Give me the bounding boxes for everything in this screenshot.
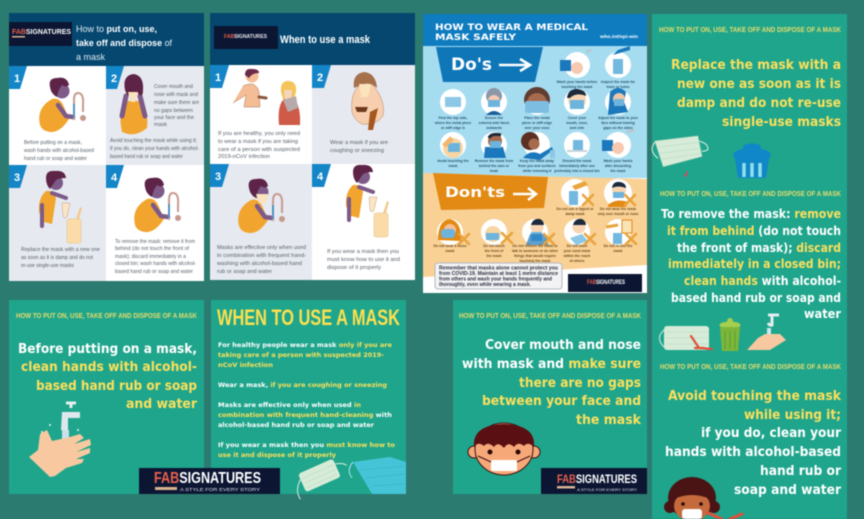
header: HOW TO WEAR A MEDICAL <box>435 23 588 33</box>
do's row 2: Ensure the <box>485 116 503 120</box>
panel: cover mouth and nose: HOW TO PUT ON, USE, TAKE OFF AND DISPOSE OF A MASK <box>459 311 641 320</box>
don'ts row 2: talk to someone or do other <box>512 249 559 253</box>
step 2: 2 <box>111 73 117 85</box>
panel: before putting on a mask: HOW TO PUT ON, USE, TAKE OFF AND DISPOSE OF A MASK <box>16 311 197 320</box>
icon: green bin <box>720 318 740 351</box>
step 1: If you are healthy, you only need <box>218 131 300 137</box>
panel header <box>210 13 415 65</box>
do's row 3: immediately after use <box>559 164 595 168</box>
icon: washing hands under tap <box>29 403 91 477</box>
do's row 2: Cover your <box>568 116 587 120</box>
icon: girl with mask <box>664 477 742 519</box>
section: avoid touching: while using it; <box>744 408 841 423</box>
reminder note: from others and wash your hands frequently and <box>439 276 552 282</box>
do's row 2: or stiff edge is <box>441 126 465 130</box>
do's row 3: Discard the mask <box>562 159 592 163</box>
step 2: based hand rub or soap and water <box>110 154 183 160</box>
step 4 <box>106 165 196 275</box>
body copy <box>218 341 396 459</box>
don'ts row 2: Do not leave <box>567 244 587 248</box>
step 4: To remove the mask: remove it from <box>115 239 195 245</box>
body copy: For healthy people wear a mask only if you are <box>218 341 393 349</box>
step 3: rub or soap and water <box>217 269 272 275</box>
heading: How to put on, use, <box>76 24 157 35</box>
don'ts row 2: mask <box>614 249 623 253</box>
do's row 3: Wash your hands <box>603 159 633 163</box>
do's row 3: after discarding <box>605 164 631 168</box>
step 4: behind (do not touch the front of <box>115 246 190 252</box>
body copy: alcohol-based hand rub or soap and water <box>218 421 375 429</box>
panel: before putting on a mask: based hand rub or soap <box>36 379 197 394</box>
reminder note: Remember that masks alone cannot protect you <box>439 266 558 272</box>
panel: cover mouth and nose <box>453 300 647 494</box>
section: replace the mask: Replace the mask with a <box>671 58 841 73</box>
panel: cover mouth and nose: between your face and <box>482 394 641 409</box>
step 2 <box>312 65 388 154</box>
section: remove the mask: it from behind (do not touch <box>667 224 841 238</box>
step 3: Replace the mask with a new one <box>21 247 100 253</box>
step 3: 3 <box>14 172 20 184</box>
body copy: combination with frequent hand-cleaning with <box>218 411 392 419</box>
don'ts row 1: damp mask <box>565 212 585 216</box>
don'ts row 2: of others <box>570 259 585 263</box>
icon: red mark <box>684 171 688 177</box>
step 1: wash hands with alcohol-based <box>24 148 94 154</box>
panel: before putting on a mask: clean hands with alcohol- <box>21 360 197 375</box>
do's row 3 <box>437 130 634 173</box>
don'ts row 1: only over mouth or nose <box>598 212 638 216</box>
step 2: nose with mask and <box>154 92 198 98</box>
step 1: 1 <box>215 72 221 84</box>
step 3 <box>9 165 100 269</box>
step 2 <box>106 66 199 160</box>
icon: washing hands <box>747 315 786 350</box>
heading: WHEN TO USE A MASK <box>217 305 400 330</box>
body copy: If you wear a mask then you must know how to <box>218 441 396 449</box>
don'ts row 2: Do not re-use the <box>604 244 632 248</box>
panel: how to wear a medical mask safely <box>423 14 647 293</box>
don'ts banner: Don'ts <box>445 185 505 201</box>
header: who.int/epi-win <box>599 34 638 39</box>
do's row 2: mouth, nose, <box>566 121 588 125</box>
panel: when to use a mask illustrated <box>210 13 415 280</box>
don'ts row 1: Do not use a ripped or <box>556 207 594 211</box>
section: avoid touching: Avoid touching the mask <box>668 389 841 404</box>
logo: FABSIGNATURES <box>587 279 625 286</box>
heading: take off and dispose of <box>76 38 172 49</box>
logo <box>139 468 280 494</box>
icon: blue bin <box>733 144 771 178</box>
step 2: Wear a mask if you are <box>330 140 388 146</box>
step 2: your face and the <box>154 115 194 121</box>
heading: a mask <box>76 52 105 63</box>
do's row 2 <box>434 87 639 130</box>
body copy: nCoV infection <box>218 361 273 369</box>
step 2: Cover mouth and <box>154 84 193 90</box>
don'ts row 2: touching the mask <box>520 259 551 263</box>
don'ts row 2: your used mask <box>564 249 590 253</box>
heading: When to use a mask <box>280 34 371 46</box>
logo <box>541 468 647 494</box>
icon: mask held by fingers <box>660 326 712 350</box>
don'ts row 2: within the reach <box>563 254 590 258</box>
do's row 2: colored-side faces <box>479 121 509 125</box>
body copy: taking care of a person with suspected 2019- <box>218 351 384 359</box>
do's row 1: tears or holes <box>607 85 630 89</box>
step 3: as soon as it is damp and do not <box>21 255 94 261</box>
do's row 3: while removing it <box>522 169 552 173</box>
reminder note: from COVID-19. Maintain at least 1 metre distance <box>439 271 558 277</box>
logo: FABSIGNATURES <box>12 29 71 36</box>
step 1: hand rub or soap and water <box>24 156 87 162</box>
step 1 <box>210 65 300 160</box>
panel: tall right column tips <box>652 14 847 519</box>
do's row 1: touching the mask <box>562 85 593 89</box>
section: replace the mask: new one as soon as it is <box>677 77 841 92</box>
panel: before putting on a mask <box>9 300 280 494</box>
section: replace the mask <box>652 25 841 178</box>
panel: before putting on a mask: and water <box>126 397 198 412</box>
body copy: use it and dispose of it properly <box>218 451 337 459</box>
do's row 3: the mask <box>610 169 626 173</box>
step 2: coughing or sneezing <box>330 148 384 154</box>
step 4: dispose of it properly <box>327 265 382 271</box>
section: remove the mask: immediately in a closed bin; <box>668 257 841 271</box>
section: avoid touching: hands with alcohol-based <box>665 445 841 460</box>
logo: A STYLE FOR EVERY STORY <box>577 488 638 492</box>
reminder note <box>435 263 562 289</box>
do's row 2: Adjust the mask to your <box>598 116 639 120</box>
panel: how to put on, use, take off and dispose of a mask <box>9 13 204 281</box>
step 4: mask); discard immediately in a <box>115 254 186 260</box>
step 4: closed bin; wash hands with alcohol- <box>115 261 196 267</box>
do's row 3: mask <box>449 164 458 168</box>
step 3: Masks are effective only when used <box>217 245 306 251</box>
icon: blue masks <box>349 457 406 494</box>
step 1 <box>9 66 94 162</box>
step 2: mask <box>154 122 168 128</box>
do's row 2: Find the top side, <box>439 116 468 120</box>
logo: FABSIGNATURES <box>154 470 261 487</box>
do's row 3: head <box>490 169 498 173</box>
step 4: must know how to use it and <box>327 257 400 263</box>
step 1: care of a person with suspected <box>218 147 300 153</box>
do's row 1 <box>557 46 636 89</box>
icon: boy with mask <box>468 423 540 475</box>
step 4: 4 <box>317 171 324 183</box>
panel: cover mouth and nose: there are no gaps <box>519 376 641 391</box>
section: remove the mask <box>660 189 841 351</box>
step 4 <box>312 164 400 271</box>
step 2: Avoid touching the mask while using it; <box>110 138 197 144</box>
header: MASK SAFELY <box>435 33 517 43</box>
do's row 3: from you and surfaces <box>518 164 556 168</box>
section: remove the mask: To remove the mask: remove <box>661 207 841 221</box>
do's row 3: behind the ears or <box>479 164 510 168</box>
body copy: Wear a mask, if you are coughing or sneezing <box>218 381 387 389</box>
step 2: if you do, clean your hands with alcohol- <box>110 146 199 152</box>
logo: A STYLE FOR EVERY STORY <box>180 487 260 492</box>
section: avoid touching: if you do, clean your <box>701 426 842 441</box>
panel: when to use a mask text <box>211 300 406 499</box>
don'ts row 2: the front of <box>485 249 504 253</box>
logo <box>214 26 278 49</box>
do's banner: Do's <box>451 55 492 75</box>
section: remove the mask: water <box>804 307 841 321</box>
do's row 2: outwards <box>486 126 502 130</box>
reminder note: thoroughly, even while wearing a mask. <box>439 282 532 288</box>
do's row 3: Remove the mask from <box>475 159 513 163</box>
do's row 3: Avoid touching the <box>437 159 469 163</box>
step 4: based hand rub or soap and water <box>115 269 193 275</box>
section: avoid touching <box>660 362 842 519</box>
do's row 2: over your nose <box>524 126 550 130</box>
step 3: in combination with frequent hand- <box>217 253 306 259</box>
step 2: 2 <box>317 72 323 84</box>
step 1: Before putting on a mask, <box>24 140 82 146</box>
do's row 2: piece or stiff edge <box>522 121 552 125</box>
don'ts background <box>423 173 647 277</box>
do's row 3: Keep the mask away <box>520 159 554 163</box>
don'ts row 2: mask <box>446 249 455 253</box>
section: avoid touching: soap and water <box>734 483 842 498</box>
logo <box>568 274 642 292</box>
do's row 2: Place the metal <box>524 116 550 120</box>
step 1: to wear a mask if you are taking <box>218 139 298 145</box>
icon: mask <box>652 136 708 167</box>
do's row 2: where the metal piece <box>434 121 471 125</box>
step 3: re-use single-use masks <box>21 263 74 269</box>
header <box>423 14 647 46</box>
section: avoid touching: hand rub or <box>760 464 842 479</box>
do's row 2: and chin <box>570 126 584 130</box>
don'ts row 2: Do not remove the mask to <box>513 244 557 248</box>
panel: cover mouth and nose: with mask and make sure <box>462 357 641 372</box>
panel: cover mouth and nose: Cover mouth and nose <box>485 338 641 353</box>
don'ts row 2: Do not touch <box>483 244 505 248</box>
don'ts row 2: things that would require <box>514 254 556 258</box>
don'ts row 2: the mask <box>486 254 502 258</box>
section: remove the mask: the front of mask); discard <box>677 241 841 255</box>
don'ts row 2: Do not wear a loose <box>433 244 467 248</box>
logo <box>9 22 72 46</box>
don'ts row 1 <box>556 179 638 216</box>
panel: cover mouth and nose: the mask <box>576 413 641 428</box>
section: replace the mask: damp and do not re-use <box>677 96 841 111</box>
section: remove the mask: clean hands with alcohol- <box>684 274 841 288</box>
don'ts row 1: Do not wear the mask <box>600 207 636 211</box>
don'ts row 2 <box>433 219 636 263</box>
step 1: 2019-nCoV infection <box>218 154 270 160</box>
body copy: Masks are effective only when used in <box>218 401 361 409</box>
step 3: 3 <box>215 171 221 183</box>
icon: white mask <box>290 454 352 499</box>
logo: FABSIGNATURES <box>224 34 267 40</box>
panel: before putting on a mask: Before putting on a mask, <box>18 342 197 357</box>
do's row 3: preferably into a closed bin <box>554 169 600 173</box>
logo: FABSIGNATURES <box>557 472 637 486</box>
section: replace the mask: single-use masks <box>722 115 841 130</box>
step 2: make sure there are <box>154 100 199 106</box>
panel header <box>9 13 204 66</box>
section: remove the mask: based hand rub or soap and <box>671 291 841 305</box>
do's banner <box>436 47 543 82</box>
don'ts banner <box>433 173 548 210</box>
do's row 1: Wash your hands before <box>557 80 597 84</box>
step 2: no gaps between <box>154 108 193 114</box>
step 4: 4 <box>111 172 118 184</box>
do's row 1: Inspect the mask for <box>601 80 636 84</box>
heading <box>76 24 172 63</box>
step 3 <box>210 164 306 275</box>
step 3: washing with alcohol-based hand <box>217 261 302 267</box>
step 1: 1 <box>14 73 20 85</box>
do's row 2: gaps on the sides <box>603 126 633 130</box>
step 4: If you wear a mask then you <box>327 249 399 255</box>
do's row 2: face without leaving <box>601 121 635 125</box>
